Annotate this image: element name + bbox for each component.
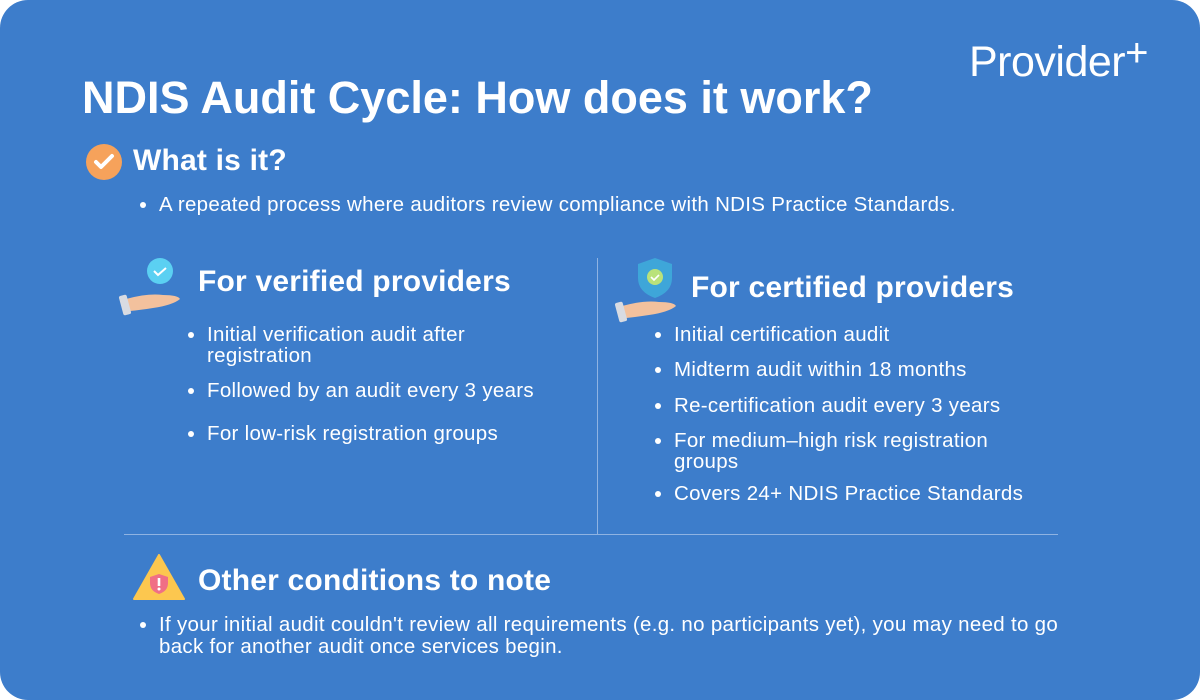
list: certified: Initial certification audit <box>674 323 889 346</box>
divider horizontal <box>124 534 1058 535</box>
list: verified <box>188 323 534 445</box>
list: certified <box>655 323 1023 505</box>
heading: other conditions: Other conditions to note <box>198 564 551 597</box>
icon: orange check <box>86 144 122 180</box>
text: other conditions: back for another audit once services begin. <box>159 635 563 658</box>
text: definition: A repeated process where auditors review compliance with NDIS Practice Standards. <box>159 193 956 216</box>
icon: warning <box>133 554 185 600</box>
list: verified: For low-risk registration groups <box>207 422 498 445</box>
list: certified: Midterm audit within 18 months <box>674 358 967 381</box>
list: certified: Re-certification audit every 3 years <box>674 394 1000 417</box>
heading: certified: For certified providers <box>691 271 1014 304</box>
list: certified: For medium–high risk registration <box>674 429 988 452</box>
text: other conditions: If your initial audit couldn't review all requirements (e.g. no participants yet), you may need to go <box>159 613 1058 636</box>
list: certified: Covers 24+ NDIS Practice Standards <box>674 482 1023 505</box>
logo: Provider+ <box>969 31 1148 86</box>
list: verified: registration <box>207 344 312 367</box>
list: verified: Initial verification audit after <box>207 323 465 346</box>
divider vertical <box>597 258 598 534</box>
list: verified: Followed by an audit every 3 years <box>207 379 534 402</box>
title: NDIS Audit Cycle: How does it work? <box>82 72 873 123</box>
icon: hand with shield <box>615 258 676 322</box>
icon: hand with check <box>119 258 180 316</box>
text: other conditions <box>140 613 1058 658</box>
heading: verified: For verified providers <box>198 265 511 298</box>
heading: what is it: What is it? <box>133 144 287 177</box>
list: certified: groups <box>674 450 738 473</box>
